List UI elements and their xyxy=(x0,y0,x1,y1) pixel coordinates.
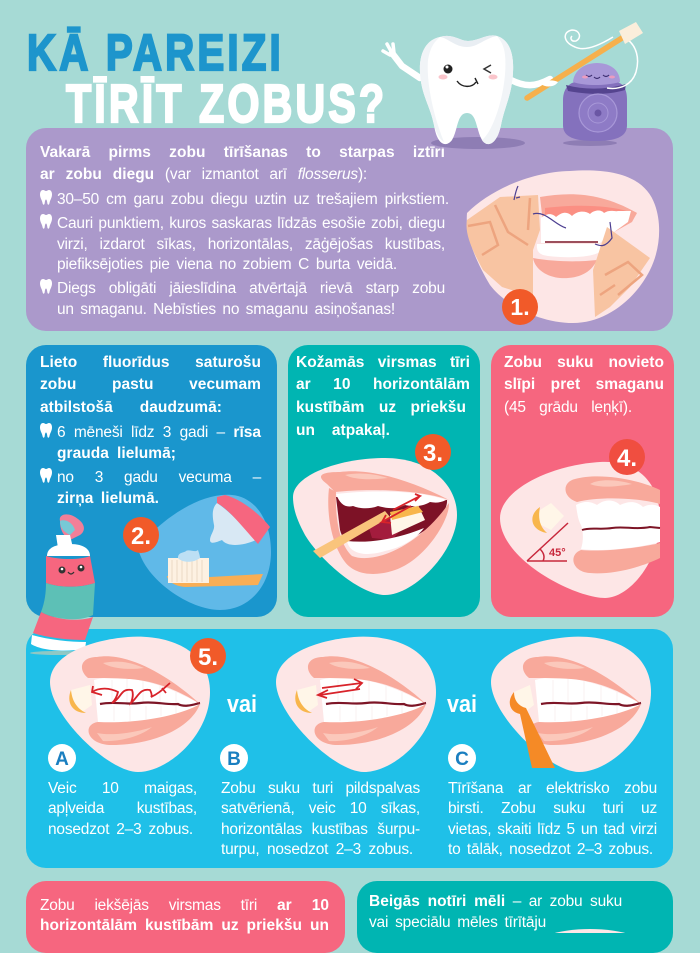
text: step 3 instructions: kustībām uz priekšu xyxy=(296,399,466,416)
badge: letter A: A xyxy=(55,749,69,770)
text: step 1 instructions: un smaganu. Nebīsties no smaganu asiņošanas! xyxy=(57,301,395,318)
panel: tongue xyxy=(357,881,673,953)
text: step 1 instructions: piefiksējoties pie viena no zobiem C burta veidā. xyxy=(57,256,397,273)
text: method C xyxy=(448,780,657,858)
text: step 2 instructions: Lieto fluorīdus saturošu xyxy=(40,354,261,371)
badge: number 3: 3. xyxy=(423,440,443,467)
text: tongue instructions: vai speciālu mēles tīrītāju xyxy=(369,914,546,931)
text: vai 1: vai xyxy=(227,691,257,718)
icon: floss box mascot xyxy=(563,30,638,141)
text: inner surfaces instructions xyxy=(40,897,329,934)
text: step 2 instructions: zirņa lielumā. xyxy=(57,490,159,507)
text: step 3 instructions: ar 10 horizontālām xyxy=(296,376,470,393)
text: step 3 instructions xyxy=(296,354,470,439)
text: step 1 instructions: Vakarā pirms zobu tīrīšanas to starpas iztīri xyxy=(40,144,445,161)
text: method A xyxy=(48,780,197,838)
illustration: mouth with 45 degree brush: 45° xyxy=(549,547,566,559)
panel: step 1 floss xyxy=(26,128,673,331)
text: method C: Tīrīšana ar elektrisko zobu xyxy=(448,780,657,797)
icon: mascot toothbrush xyxy=(527,22,643,98)
title: first line: KĀ PAREIZI xyxy=(27,23,284,81)
badge: letter B: B xyxy=(227,749,241,770)
text: method C: vietas, skaiti līdz 5 un tad virzi xyxy=(448,821,657,838)
badge: number 3 xyxy=(415,434,451,470)
badge: number 1 xyxy=(502,289,538,325)
badge: letter A xyxy=(48,744,76,772)
icon: tooth mascot xyxy=(383,35,550,144)
illustration: method C mouth xyxy=(491,637,651,772)
illustration: open mouth with brush xyxy=(293,458,457,595)
text: method C: to tālāk, nosedzot 2–3 zobus. xyxy=(448,841,653,858)
text: tongue instructions xyxy=(369,893,622,931)
badge: letter B xyxy=(220,744,248,772)
badge: number 2 xyxy=(123,517,159,553)
badge: number 4: 4. xyxy=(617,445,637,472)
shadow under floss box xyxy=(563,140,617,146)
text: method B: horizontālas kustības šurpu- xyxy=(221,821,420,838)
blob: tongue illustration top xyxy=(530,929,650,953)
text: step 2 instructions: grauda lielumā; xyxy=(57,445,176,462)
text: step 1 instructions: 30–50 cm garu zobu diegu uztin uz trešajiem pirkstiem. xyxy=(57,191,449,208)
text: step 1 instructions: ar zobu diegu (var izmantot arī flosserus): xyxy=(40,166,367,183)
panel: step 2 toothpaste xyxy=(26,345,277,617)
text: tongue instructions: Beigās notīri mēli – ar zobu suku xyxy=(369,893,622,910)
panel: step 5 brushing methods xyxy=(26,629,673,868)
text: step 4 instructions: Zobu suku novieto xyxy=(504,354,664,371)
illustration: mouth with 45 degree brush xyxy=(500,462,660,598)
text: step 2 instructions: zobu pastu vecumam xyxy=(40,376,261,393)
icon: toothpaste nozzle xyxy=(210,495,270,545)
text: method A: nosedzot 2–3 zobus. xyxy=(48,821,193,838)
badge: number 2: 2. xyxy=(131,523,151,550)
text: step 2 instructions: no 3 gadu vecuma – xyxy=(57,469,261,486)
text: step 4 instructions xyxy=(504,354,664,416)
text: step 2 instructions: atbilstošā daudzumā: xyxy=(40,399,222,416)
badge: number 1: 1. xyxy=(510,294,530,320)
text: step 3 instructions: Kožamās virsmas tīri xyxy=(296,354,470,371)
badge: letter C xyxy=(448,744,476,772)
icon: brush with toothpaste xyxy=(167,550,263,587)
text: step 1 instructions xyxy=(40,144,449,318)
badge: letter C: C xyxy=(455,749,469,770)
text: method B: Zobu suku turi pildspalvas xyxy=(221,780,420,797)
illustration: method A mouth xyxy=(50,637,210,772)
text: method B xyxy=(221,780,420,858)
badge: number 5 xyxy=(190,638,226,674)
badge: number 5: 5. xyxy=(198,644,218,671)
illustration: method B mouth xyxy=(276,637,436,772)
icon: toothpaste tube mascot xyxy=(30,514,95,655)
text: step 2 instructions: 6 mēneši līdz 3 gadi – rīsa xyxy=(57,424,261,441)
text: step 4 instructions: (45 grādu leņķī). xyxy=(504,399,632,416)
panel: step 4 brush angle xyxy=(491,345,674,617)
text: step 1 instructions: virzi, izdarot sīkas, horizontālas, zāģējošas kustības, xyxy=(57,236,445,253)
text: step 2 instructions xyxy=(40,354,262,507)
blob: toothpaste background xyxy=(138,495,271,610)
text: step 3 instructions: un atpakaļ. xyxy=(296,422,390,439)
text: step 4 instructions: slīpi pret smaganu xyxy=(504,376,664,393)
shadow under tooth mascot xyxy=(431,137,525,149)
text: method B: satvērienā, veic 10 sīkas, xyxy=(221,800,420,817)
panel: inner surfaces xyxy=(26,881,345,953)
text: inner surfaces instructions: Zobu iekšējās virsmas tīri ar 10 xyxy=(40,897,329,914)
panel: step 3 chewing surfaces xyxy=(288,345,480,617)
text: method C: birsti. Zobu suku turi uz xyxy=(448,800,657,817)
text: inner surfaces instructions: horizontālām kustībām uz priekšu un xyxy=(40,917,329,934)
title: second line: TĪRĪT ZOBUS? xyxy=(66,74,387,134)
text: step 1 instructions: Diegs obligāti jāieslīdina atvērtajā rievā starp zobu xyxy=(57,280,445,297)
text: method B: turpu, nosedzot 2–3 zobus. xyxy=(221,841,413,858)
text: vai 2: vai xyxy=(447,691,477,718)
badge: number 4 xyxy=(609,439,645,475)
text: step 1 instructions: Cauri punktiem, kuros saskaras līdzās esošie zobi, diegu xyxy=(57,215,445,232)
text: method A: apļveida kustības, xyxy=(48,800,197,817)
text: method A: Veic 10 maigas, xyxy=(48,780,197,797)
illustration: flossing mouth xyxy=(466,170,659,323)
